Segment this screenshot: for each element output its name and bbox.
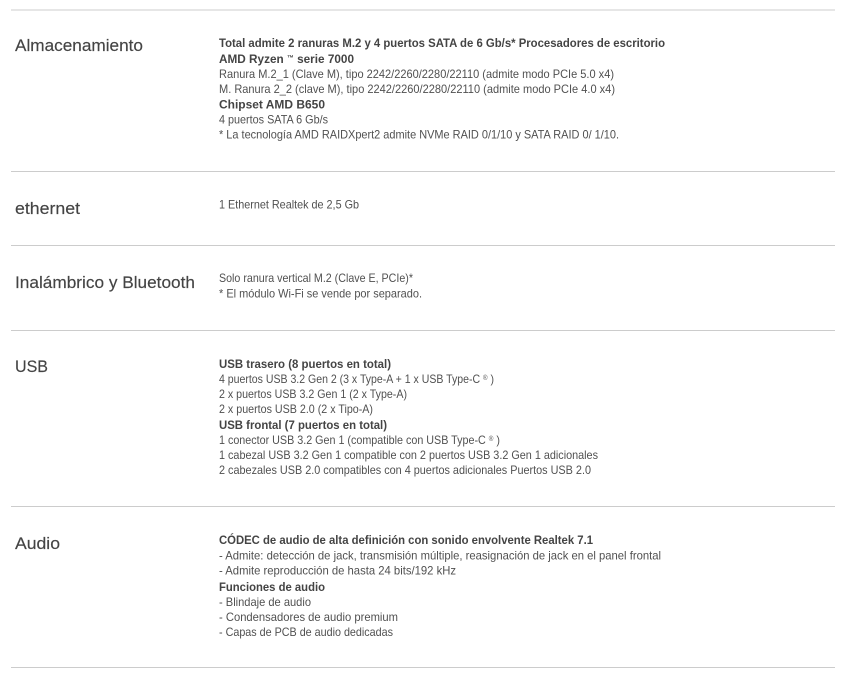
- text block: almacenamiento details: M. Ranura 2_2 (clave M), tipo 2242/2260/2280/22110 (admite modo PCIe 4.0 x4): [219, 82, 615, 96]
- text block: usb details: 1 cabezal USB 3.2 Gen 1 compatible con 2 puertos USB 3.2 Gen 1 adicionales: [219, 448, 598, 462]
- text block: almacenamiento details: AMD Ryzen: [219, 52, 285, 66]
- text block: audio details: CÓDEC de audio de alta definición con sonido envolvente Realtek 7.1: [219, 532, 593, 547]
- text block: audio details: - Blindaje de audio: [219, 595, 311, 609]
- heading: almacenamiento: Almacenamiento: [15, 37, 143, 55]
- heading: ethernet: ethernet: [15, 200, 80, 218]
- text block: usb details: 2 x puertos USB 3.2 Gen 1 (2 x Type-A): [219, 387, 407, 401]
- panel: usb: [15, 357, 598, 477]
- text block: usb details: 1 conector USB 3.2 Gen 1 (compatible con USB Type-C: [219, 433, 517, 447]
- text block: usb details: USB trasero (8 puertos en total): [219, 357, 391, 371]
- text block: almacenamiento details: * La tecnología AMD RAIDXpert2 admite NVMe RAID 0/1/10 y SATA RAID 0/ 1/10.: [219, 128, 619, 142]
- text block: audio details: - Condensadores de audio premium: [219, 610, 398, 624]
- panel: ethernet: [15, 198, 359, 218]
- heading: usb: USB: [15, 358, 48, 376]
- text block: ethernet details: 1 Ethernet Realtek de 2,5 Gb: [219, 198, 359, 212]
- text block: usb details: 2 cabezales USB 2.0 compatibles con 4 puertos adicionales Puertos USB 2.0: [219, 463, 591, 477]
- heading: audio: Audio: [15, 535, 60, 553]
- panel: audio: [15, 532, 661, 639]
- text block: inalámbrico details: * El módulo Wi-Fi se vende por separado.: [219, 286, 422, 300]
- text block: usb details: 4 puertos USB 3.2 Gen 2 (3 x Type-A + 1 x USB Type-C: [219, 372, 516, 386]
- text block: inalámbrico details: Solo ranura vertical M.2 (Clave E, PCIe)*: [219, 271, 413, 285]
- text block: audio details: Funciones de audio: [219, 580, 325, 594]
- text block: usb details: USB frontal (7 puertos en total): [219, 418, 387, 432]
- text block: almacenamiento details: ™: [287, 55, 294, 62]
- text block: audio details: - Admite reproducción de hasta 24 bits/192 kHz: [219, 564, 456, 578]
- text block: usb details: ®: [489, 435, 494, 443]
- text block: almacenamiento details: [219, 36, 665, 142]
- text block: audio details: - Capas de PCB de audio dedicadas: [219, 625, 393, 639]
- text block: almacenamiento details: serie 7000: [294, 52, 354, 66]
- text block: audio details: [219, 532, 661, 639]
- text block: almacenamiento details: Total admite 2 ranuras M.2 y 4 puertos SATA de 6 Gb/s* Procesadores de escritorio: [219, 36, 665, 50]
- heading: inalámbrico y bluetooth: Inalámbrico y Bluetooth: [15, 274, 195, 292]
- text block: almacenamiento details: 4 puertos SATA 6 Gb/s: [219, 112, 328, 126]
- text block: usb details: 2 x puertos USB 2.0 (2 x Tipo-A): [219, 402, 373, 416]
- text block: usb details: ): [488, 372, 494, 386]
- text block: audio details: - Admite: detección de jack, transmisión múltiple, reasignación de jack en el panel frontal: [219, 548, 661, 562]
- panel: inalámbrico y bluetooth: [15, 271, 422, 300]
- text block: almacenamiento details: Chipset AMD B650: [219, 98, 325, 112]
- panel: almacenamiento: [15, 36, 665, 142]
- text block: usb details: ): [493, 433, 500, 447]
- text block: usb details: ®: [483, 374, 488, 382]
- text block: inalámbrico details: [219, 271, 422, 300]
- text block: almacenamiento details: Ranura M.2_1 (Clave M), tipo 2242/2260/2280/22110 (admite modo PCIe 5.0 x4): [219, 67, 614, 81]
- text block: usb details: [219, 357, 598, 477]
